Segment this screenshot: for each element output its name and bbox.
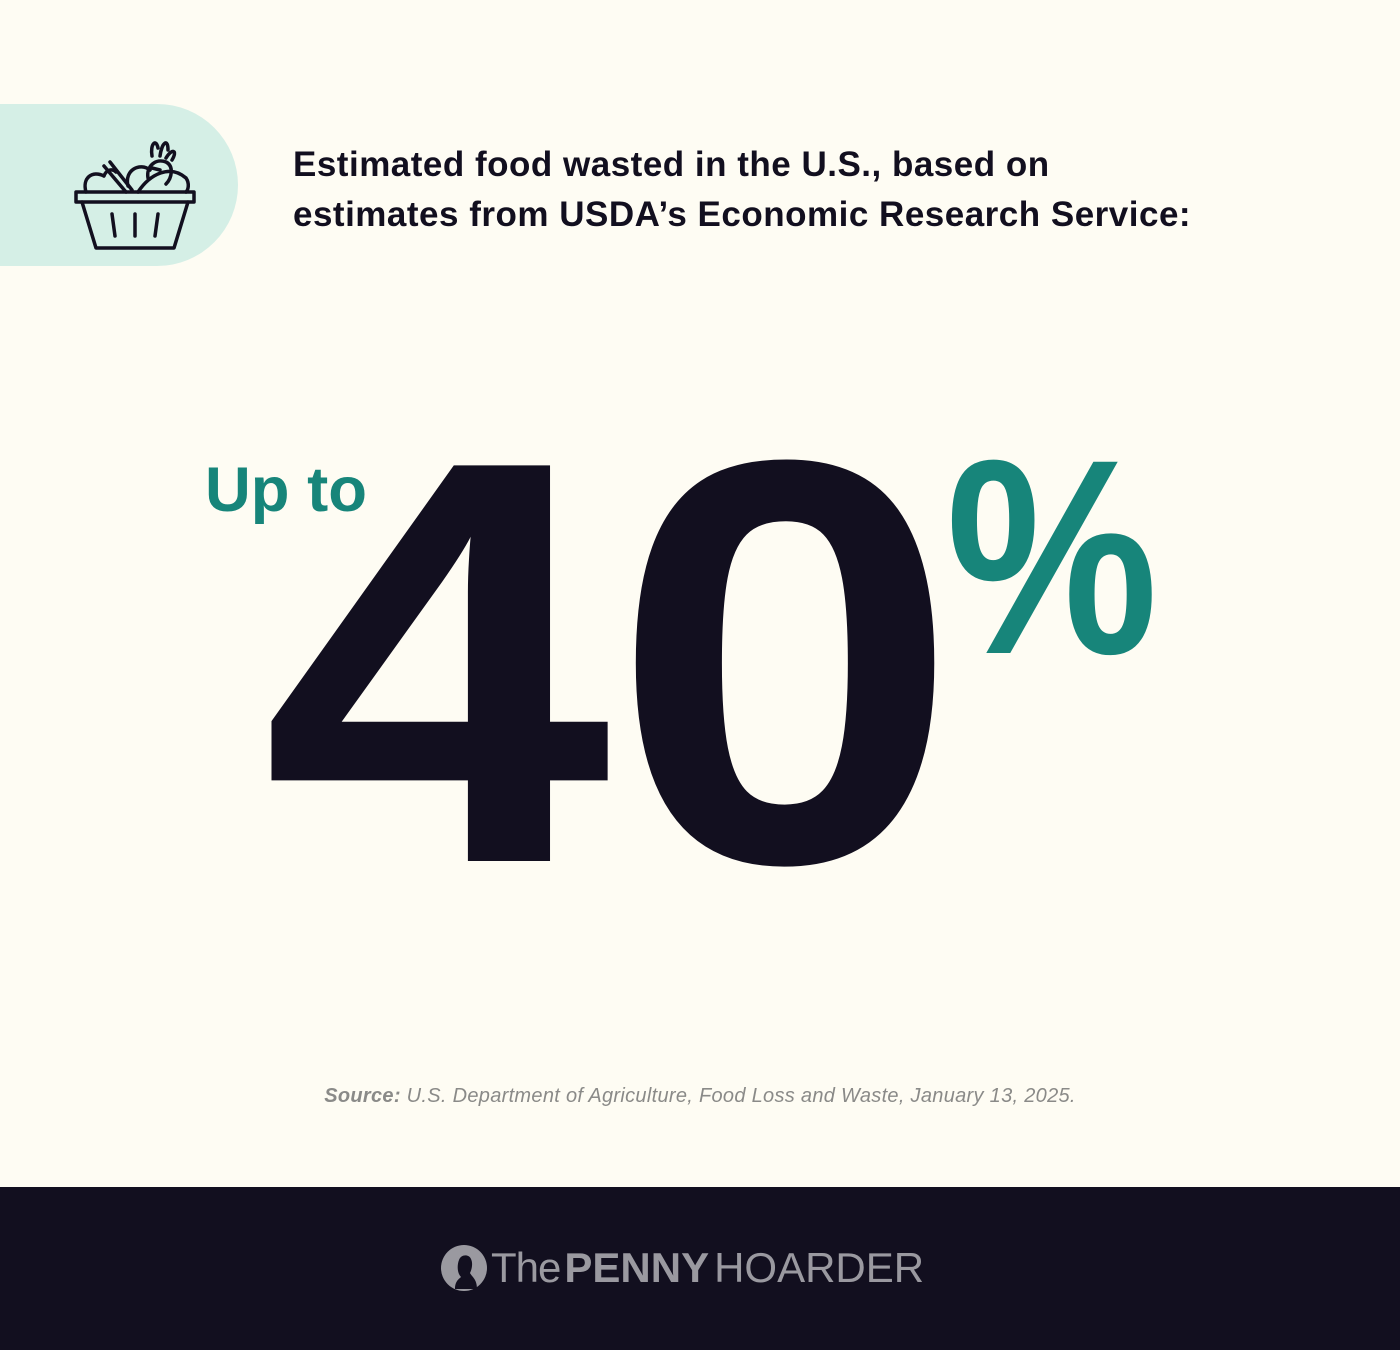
logo: HOARDER [714,1244,924,1291]
icon: basket [76,143,194,248]
logo [441,1244,924,1291]
percent sign: % [946,401,1158,712]
title: estimates from USDA’s Economic Research Service: [293,195,1191,234]
title: Estimated food wasted in the U.S., based on [293,145,1050,184]
big stat [205,340,1158,983]
logo: PENNY [564,1244,709,1291]
icon: silhouette [441,1245,487,1291]
number 40: 40 [262,340,960,983]
logo: The [491,1244,560,1291]
title [293,145,1191,234]
icon panel: basket [0,104,238,266]
footer [0,1187,1400,1350]
label: up to: Up to [205,455,367,525]
source: Source: U.S. Department of Agriculture, Food Loss and Waste, January 13, 2025. [324,1085,1076,1107]
